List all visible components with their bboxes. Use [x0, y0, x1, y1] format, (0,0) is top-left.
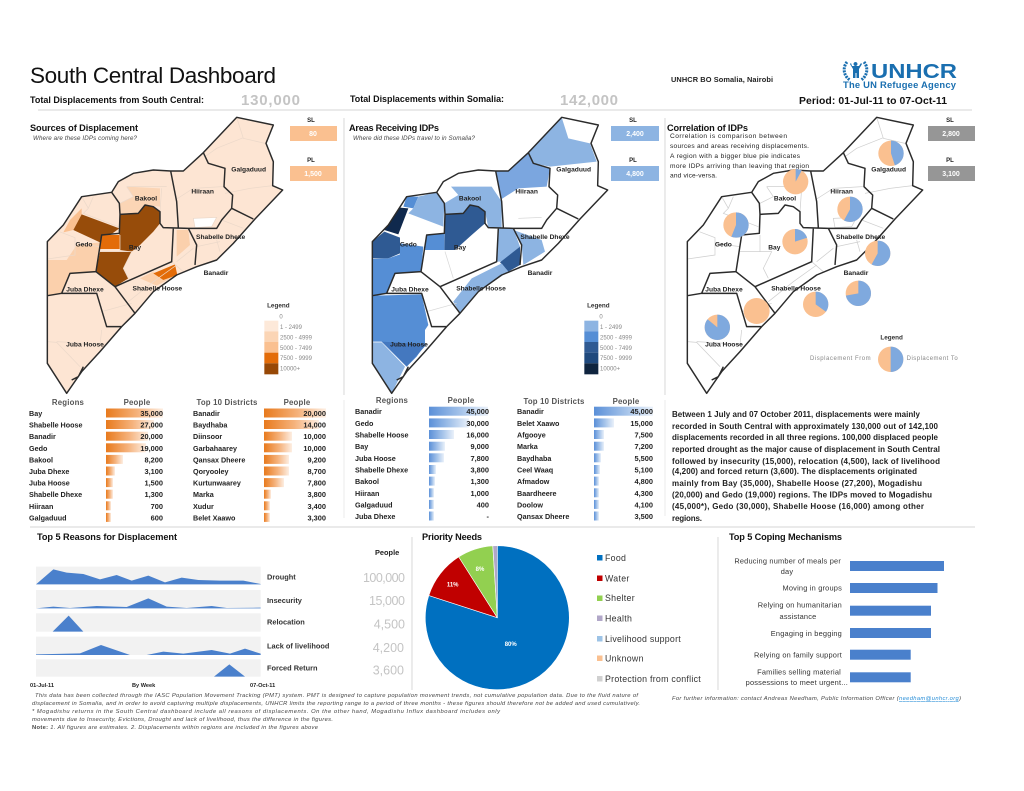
table: source districts: People [284, 398, 311, 407]
narrative text: regions. [672, 514, 702, 523]
contact line: For further information: contact Andreas Needham, Public Information Officer (needham@unhcr.org) [672, 696, 961, 702]
table: receiving regions: Gedo [355, 419, 374, 428]
table: receiving districts: Belet Xaawo [517, 419, 560, 428]
map: sources of displacement: Shabelle Hoose [133, 286, 182, 293]
table: receiving regions: 1,300 [470, 477, 489, 486]
table: source districts: 14,000 [303, 421, 326, 430]
table: receiving districts: Afgooye [517, 430, 546, 440]
bar chart: coping mechanisms: Relying on family support [754, 650, 842, 660]
panel: top 5 coping mechanisms [729, 532, 944, 687]
footnotes: Note: 1. All figures are estimates. 2. Displacements within regions are included in the figures above [32, 725, 319, 731]
table: source regions: 27,000 [140, 421, 163, 430]
table: receiving regions: 30,000 [466, 419, 489, 428]
panel: correlation of IDPs [667, 117, 975, 393]
table: source regions: 19,000 [140, 444, 163, 453]
bar chart: coping mechanisms: Families selling material [757, 668, 841, 676]
map: areas receiving IDPs: Juba Hoose [390, 341, 428, 348]
table: receiving regions: 45,000 [466, 407, 489, 416]
table: source regions: 3,100 [144, 467, 163, 476]
legend: sources: 5000 - 7499 [280, 346, 313, 352]
heading: correlation: Correlation of IDPs [667, 123, 748, 133]
narrative text: (20,000) and Gedo (19,000) regions. The IDPs moved to Mogadishu [672, 490, 932, 500]
table: source districts: Diinsoor [193, 432, 222, 441]
table: source districts: 10,000 [303, 444, 326, 453]
table: receiving districts: Baardheere [517, 489, 557, 498]
SL and PL boxes: sources: PL [307, 158, 315, 164]
table: receiving districts: People [613, 397, 640, 406]
table: receiving regions: People [448, 396, 475, 405]
SL and PL boxes: areas: 2,400 [626, 131, 644, 138]
legend: areas: 1 - 2499 [600, 325, 623, 331]
table: source districts: Kurtunwaarey [193, 479, 241, 488]
time axis labels: 01-Jul-11 [30, 683, 54, 689]
SL and PL boxes: correlation [928, 118, 975, 181]
pie chart: priority needs: 8% [476, 567, 485, 573]
legend: priority needs: Unknown [605, 654, 644, 664]
legend: priority needs: Shelter [605, 593, 635, 603]
footnotes: * Mogadishu returns in the South Central dashboard include all reasons of displacements. On the other hand, Mogadishu Influx dashboard includes only [32, 709, 501, 715]
table: source regions: Regions [52, 398, 85, 407]
table: source districts: 3,400 [308, 502, 326, 511]
table: source districts: Marka [193, 490, 215, 499]
table: receiving districts: 4,800 [634, 477, 653, 486]
narrative text: displacements recorded in all three regions. 100,000 displaced people [672, 433, 939, 442]
map: sources of displacement: Bay [129, 245, 141, 252]
table: receiving districts: 5,100 [634, 466, 653, 474]
table: receiving districts: Baydhaba [517, 454, 552, 463]
narrative text: (4,200) and forced return (3,600). The displacements originated [672, 467, 917, 476]
legend: areas: 7500 - 9999 [600, 356, 633, 362]
correlation explanation: and vice-versa. [670, 172, 717, 180]
table: receiving districts: 15,000 [630, 419, 653, 428]
table: receiving regions: Banadir [355, 407, 382, 416]
legend: priority needs: Food [605, 553, 626, 563]
table: source regions: Shabelle Hoose [29, 421, 83, 430]
total displacements from South Central [30, 92, 300, 109]
table: source regions: 600 [151, 513, 163, 522]
narrative text: (45,000*), Gedo (30,000), Shabelle Hoose (16,000) among other [672, 502, 924, 511]
legend: sources: 0 [279, 315, 283, 321]
subheading: sources: Where are these IDPs coming here? [33, 135, 138, 142]
heading: sources: Sources of Displacement [30, 123, 138, 133]
bar chart: coping mechanisms: Moving in groups [783, 584, 842, 592]
narrative text: reported drought as the major cause of displacement in South Central [672, 445, 940, 454]
office name: UNHCR BO Somalia, Nairobi [671, 75, 773, 84]
bar chart: coping mechanisms: Relying on humanitarian [758, 600, 842, 610]
table: receiving districts: Marka [517, 442, 539, 451]
footnotes: displacement in Somalia, and in order to avoid capturing multiple displacements, UNHCR limits the reporting range to a period of three months - these figures should therefore not be added and used cumulatively. [32, 701, 640, 707]
narrative text [672, 410, 940, 523]
table: source districts: 7,800 [308, 479, 326, 488]
SL and PL boxes: sources [290, 118, 337, 181]
legend: sources: 1 - 2499 [280, 325, 303, 331]
table: source districts [193, 398, 326, 522]
correlation explanation: more IDPs arriving than leaving that region [670, 163, 809, 170]
table: receiving districts: Qansax Dheere [517, 512, 569, 521]
legend: areas [584, 302, 633, 374]
table: source regions: People [124, 398, 151, 407]
sparklines [36, 567, 261, 677]
table: source regions: Juba Hoose [29, 479, 70, 488]
table: source regions: Gedo [29, 444, 48, 453]
map: sources of displacement: Bakool [135, 196, 157, 203]
map: areas receiving IDPs [372, 117, 633, 393]
SL and PL boxes: correlation: 3,100 [942, 171, 960, 178]
sparkline labels and totals: Drought [267, 572, 296, 582]
panel: priority needs [422, 532, 701, 690]
period: Period: 01-Jul-11 to 07-Oct-11 [799, 96, 947, 107]
legend: priority needs: Livelihood support [605, 634, 681, 644]
SL and PL boxes: correlation: 2,800 [942, 131, 960, 138]
SL and PL boxes: areas: PL [629, 158, 637, 164]
map: areas receiving IDPs: Bay [454, 245, 466, 252]
legend: priority needs: Health [605, 614, 632, 624]
table: receiving regions: Bay [355, 442, 368, 451]
panel: sources of displacement [30, 117, 337, 393]
legend: areas: 10000+ [600, 367, 621, 373]
legend: areas: Legend [587, 302, 610, 309]
table: receiving regions [355, 396, 490, 521]
table: source districts: Qoryooley [193, 467, 229, 476]
legend: correlation: Displacement To [907, 356, 958, 362]
table: receiving districts: 4,300 [634, 489, 653, 498]
table: receiving regions: 400 [477, 500, 489, 509]
bar chart: coping mechanisms: possessions to meet urgent... [746, 678, 848, 687]
map: correlation: Juba Hoose [705, 341, 743, 348]
table: receiving regions: Hiiraan [355, 489, 379, 498]
heading: areas: Areas Receiving IDPs [349, 123, 439, 133]
table: source regions: 1,500 [144, 479, 163, 488]
sparkline labels and totals: Relocation [267, 618, 305, 626]
narrative text: Between 1 July and 07 October 2011, displacements were mainly [672, 410, 921, 419]
time axis labels: 07-Oct-11 [250, 683, 275, 689]
table: receiving districts: 5,500 [634, 454, 653, 463]
column label: people: People [375, 548, 399, 557]
table: source districts: 3,300 [308, 513, 326, 522]
legend: areas: 2500 - 4999 [600, 336, 633, 342]
map: areas receiving IDPs: Bakool [459, 196, 481, 203]
SL and PL boxes: correlation: PL [946, 158, 954, 164]
subheading: areas: Where did these IDPs travel to in Somalia? [353, 135, 476, 142]
table: source regions: Bay [29, 409, 42, 418]
table: source regions: 20,000 [140, 432, 163, 441]
table: source regions: Bakool [29, 455, 53, 464]
footnotes: movements due to Insecurity, Evictions, Drought and lack of livelihood, thus the difference in the figures. [32, 717, 333, 723]
correlation explanation: Correlation is comparison between [670, 133, 787, 140]
table: receiving districts: 7,200 [634, 442, 653, 451]
table: receiving regions: 9,000 [470, 442, 489, 451]
legend: correlation: Displacement From [810, 356, 871, 362]
sparkline labels and totals: Lack of livelihood [267, 642, 330, 650]
legend: sources: 10000+ [280, 367, 301, 373]
pie chart: priority needs: 11% [447, 582, 459, 588]
map: sources of displacement: Hiiraan [191, 188, 214, 195]
pie chart: priority needs: 80% [505, 642, 517, 648]
table: receiving regions: 1,000 [470, 489, 489, 498]
heading: priority needs: Priority Needs [422, 532, 482, 542]
legend: sources: 7500 - 9999 [280, 356, 313, 362]
sparkline labels and totals [267, 571, 405, 678]
SL and PL boxes: sources: 80 [309, 131, 317, 138]
sparkline labels and totals: 100,000 [363, 571, 405, 585]
map: correlation: Galgaduud [871, 166, 906, 173]
table: source regions: Banadir [29, 432, 56, 441]
map: correlation [687, 117, 958, 393]
table: receiving districts: 45,000 [630, 407, 653, 416]
map: correlation: Shabelle Dhexe [836, 234, 886, 241]
bar chart: coping mechanisms: Engaging in begging [771, 629, 842, 638]
table: receiving regions: 16,000 [466, 430, 489, 440]
table: source districts: 20,000 [303, 409, 326, 418]
table: receiving regions: Galgaduud [355, 500, 393, 509]
table: source regions: 700 [151, 502, 163, 511]
table: source regions: Juba Dhexe [29, 467, 69, 476]
table: receiving regions: Juba Hoose [355, 454, 396, 463]
table: source regions: 8,200 [144, 455, 163, 464]
SL and PL boxes: sources: 1,500 [304, 171, 322, 178]
pie charts by region [705, 141, 904, 340]
table: receiving districts: Banadir [517, 407, 544, 416]
map: correlation: Banadir [844, 270, 869, 277]
SL and PL boxes: areas: 4,800 [626, 171, 644, 178]
legend: correlation [810, 335, 958, 372]
bar chart: coping mechanisms: Reducing number of meals per [734, 556, 841, 566]
table: receiving regions: Regions [376, 396, 409, 405]
correlation explanation: sources and areas receiving displacements. [670, 143, 809, 150]
UNHCR logo [843, 60, 957, 90]
table: receiving districts: 4,100 [634, 500, 653, 509]
sparkline labels and totals: 15,000 [369, 594, 405, 608]
time axis labels: By Week [132, 683, 156, 689]
table: source regions: Shabelle Dhexe [29, 490, 82, 499]
table: receiving regions: Juba Dhexe [355, 512, 395, 521]
table: source districts: Top 10 Districts [196, 398, 258, 407]
table: receiving regions: Shabelle Dhexe [355, 466, 408, 474]
table: receiving districts: Top 10 Districts [523, 397, 585, 406]
map: sources of displacement: Gedo [75, 242, 93, 249]
UNHCR logo: The UN Refugee Agency [843, 79, 957, 90]
table: source districts: 8,700 [308, 467, 326, 476]
table: source districts: Xudur [193, 502, 214, 511]
table: source districts: Belet Xaawo [193, 513, 236, 522]
map: areas receiving IDPs: Shabelle Dhexe [520, 234, 570, 241]
table: source regions: 35,000 [140, 409, 163, 418]
table: source districts: Qansax Dheere [193, 455, 245, 464]
SL and PL boxes: correlation: SL [946, 118, 954, 124]
table: receiving districts: Afmadow [517, 477, 550, 486]
footnotes [32, 693, 640, 731]
map: areas receiving IDPs: Banadir [528, 270, 553, 277]
table: source districts: Garbahaarey [193, 444, 237, 453]
legend: areas: 5000 - 7499 [600, 346, 633, 352]
map: correlation: Bakool [774, 196, 796, 203]
legend: areas: 0 [599, 315, 603, 321]
SL and PL boxes: areas [611, 118, 659, 181]
map: sources of displacement: Shabelle Dhexe [196, 234, 246, 241]
table: receiving districts [517, 397, 653, 521]
map: sources of displacement: Banadir [204, 270, 229, 277]
narrative text: mainly from Bay (35,000), Shabelle Hoose (27,200), Mogadishu [672, 479, 922, 488]
table: source districts: Banadir [193, 409, 220, 418]
table: receiving districts: Doolow [517, 500, 543, 509]
map: correlation: Shabelle Hoose [771, 286, 821, 293]
sparkline labels and totals: Forced Return [267, 664, 318, 672]
map: areas receiving IDPs: Galgaduud [556, 166, 591, 173]
narrative text: followed by insecurity (15,000), relocation (4,500), lack of livelihood [672, 457, 940, 466]
map: correlation: Gedo [715, 242, 732, 249]
map: areas receiving IDPs: Gedo [400, 242, 417, 249]
legend: priority needs: Water [605, 574, 630, 584]
SL and PL boxes: sources: SL [307, 118, 315, 124]
legend: priority needs [597, 553, 701, 684]
pie chart: priority needs [425, 546, 569, 690]
total displacements from South Central: 130,000 [241, 92, 300, 109]
bar chart: coping mechanisms: assistance [780, 612, 816, 621]
legend: priority needs: Protection from conflict [605, 674, 701, 684]
narrative text: recorded in South Central with approximately 130,000 out of 142,100 [672, 422, 939, 431]
table: source regions: Galgaduud [29, 513, 67, 522]
map: correlation: Bay [768, 245, 781, 252]
table: receiving regions: Bakool [355, 477, 379, 486]
table: source regions: Hiiraan [29, 502, 53, 511]
total displacements within Somalia [350, 92, 618, 109]
table: receiving districts: 7,500 [634, 430, 653, 440]
table: source districts: 9,200 [308, 455, 326, 464]
table: receiving districts: 3,500 [634, 512, 653, 521]
map: areas receiving IDPs: Shabelle Hoose [456, 286, 506, 293]
table: source districts: 3,800 [308, 490, 326, 499]
map: correlation: Hiiraan [830, 188, 853, 195]
panel: top 5 reasons for displacement [30, 532, 405, 689]
map: correlation: Juba Dhexe [705, 287, 743, 294]
SL and PL boxes: areas: SL [629, 118, 637, 124]
sparkline labels and totals: 4,200 [373, 641, 404, 655]
sparkline labels and totals: 4,500 [374, 618, 405, 632]
sparkline labels and totals: Insecurity [267, 596, 303, 605]
table: receiving regions: 7,800 [470, 454, 489, 463]
table: receiving regions: 3,800 [470, 466, 489, 474]
footnotes: This data has been collected through the IASC Population Movement Tracking (PMT) system. PMT is designed to capture population movement trends, not cumulative population data. Due to the fluid nature of [35, 693, 639, 699]
heading: coping: Top 5 Coping Mechanisms [729, 532, 842, 542]
heading: reasons: Top 5 Reasons for Displacement [37, 532, 177, 542]
table: source regions: 1,300 [144, 490, 163, 499]
table: receiving regions: - [487, 512, 490, 521]
total displacements within Somalia: 142,000 [560, 92, 618, 109]
legend: correlation: Legend [880, 335, 903, 342]
total displacements within Somalia: Total Displacements within Somalia: [350, 94, 504, 104]
table: source districts: 10,000 [303, 432, 326, 441]
map: sources of displacement: Galgaduud [231, 166, 266, 173]
table: receiving districts: Ceel Waaq [517, 466, 553, 474]
bar chart: coping mechanisms [734, 556, 944, 687]
map: sources of displacement [47, 117, 313, 393]
legend: sources: Legend [267, 302, 290, 309]
correlation explanation [670, 133, 809, 180]
panel: areas receiving IDPs [349, 117, 659, 393]
total displacements from South Central: Total Displacements from South Central: [30, 95, 204, 105]
map: sources of displacement: Juba Hoose [66, 341, 104, 348]
table: source districts: Baydhaba [193, 421, 228, 430]
sparkline labels and totals: 3,600 [373, 664, 404, 678]
table: receiving regions: Shabelle Hoose [355, 430, 409, 440]
UNHCR logo: UNHCR [871, 60, 957, 83]
table: source regions [29, 398, 163, 522]
map: areas receiving IDPs: Hiiraan [515, 188, 538, 195]
legend: sources [264, 302, 313, 374]
time axis labels [30, 683, 275, 689]
title: South Central Dashboard [30, 63, 276, 88]
legend: sources: 2500 - 4999 [280, 336, 313, 342]
map: areas receiving IDPs: Juba Dhexe [391, 287, 429, 294]
correlation explanation: A region with a bigger blue pie indicates [670, 153, 801, 160]
map: sources of displacement: Juba Dhexe [66, 287, 104, 294]
bar chart: coping mechanisms: day [781, 567, 793, 576]
